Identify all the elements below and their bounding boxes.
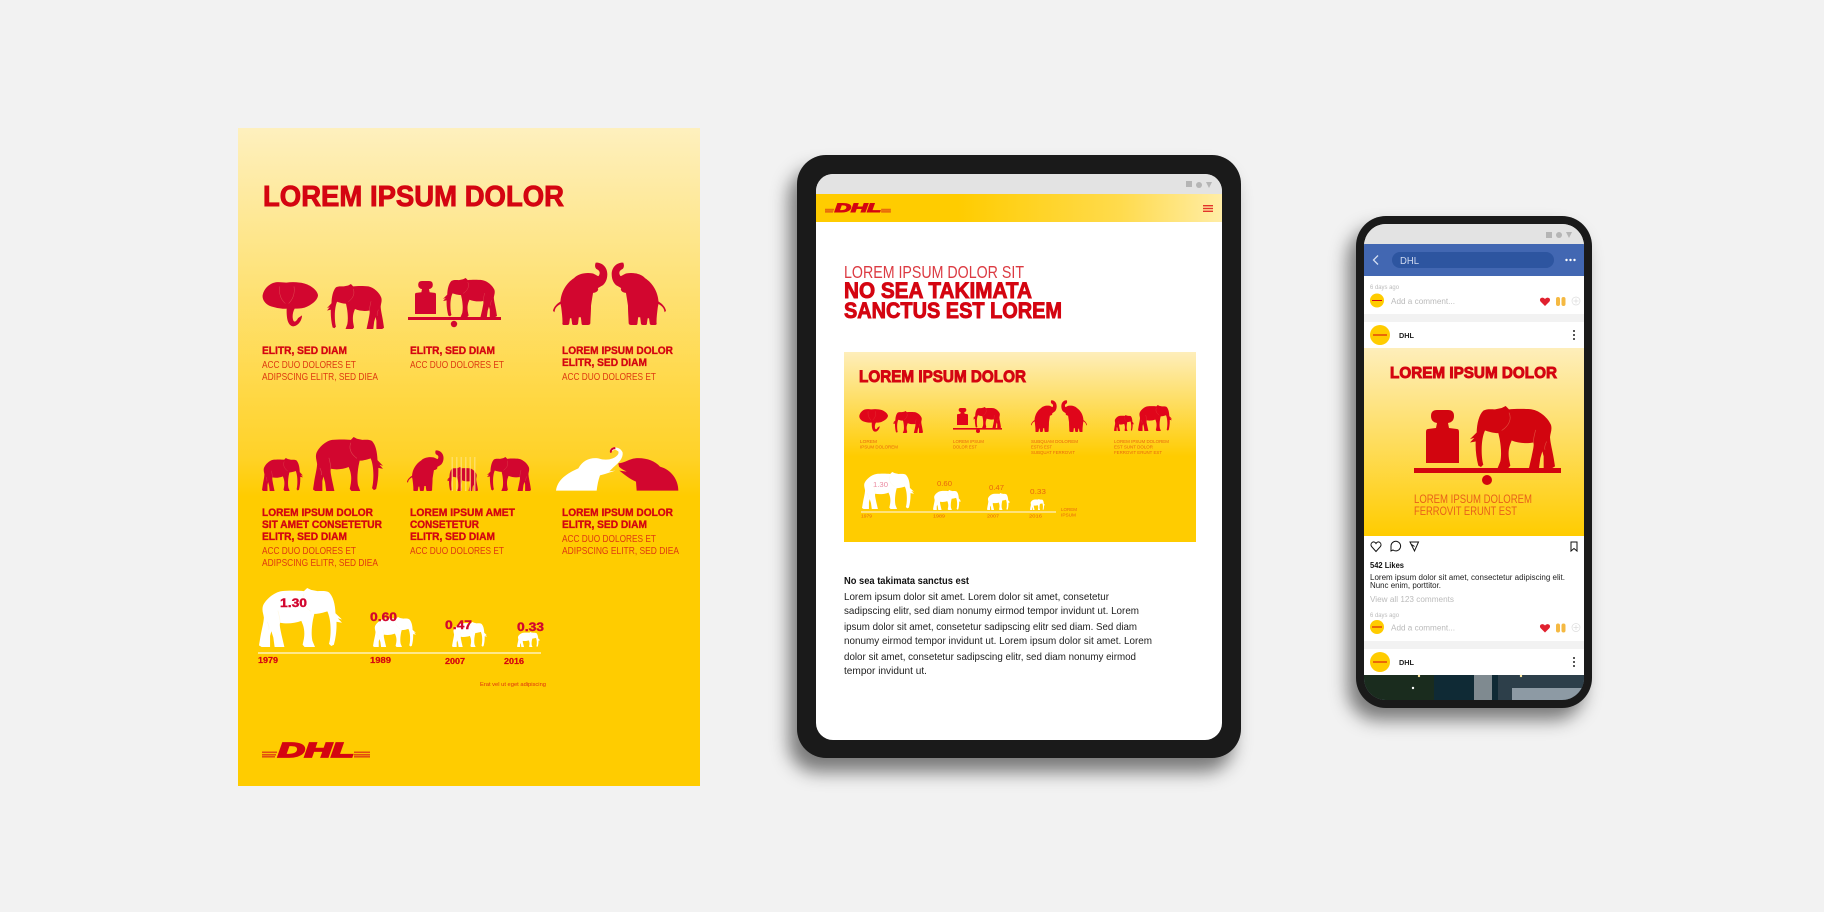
text block: column 3 row 2 — [562, 507, 679, 557]
phone status bar — [1364, 224, 1584, 244]
text block: column 2 row 1: ELITR, SED DIAM — [410, 345, 495, 357]
tablet body text: tempor invidunt ut. — [844, 665, 927, 677]
shadow: tablet — [789, 169, 1233, 772]
text block: column 2 row 2 — [410, 507, 515, 557]
tablet body text — [844, 575, 1152, 677]
text block: column 3 row 2: LOREM IPSUM DOLOR — [562, 507, 673, 519]
mini chart: IPSUM — [1061, 512, 1076, 518]
mini chart: 2016 — [1029, 514, 1043, 518]
tablet embedded infographic: LOREM IPSUM DOLOR — [859, 368, 1026, 386]
text block: column 2 row 1 — [410, 345, 504, 371]
text block: column 3 row 1: LOREM IPSUM DOLOR — [562, 345, 673, 357]
icon: free and caged elephants — [407, 450, 531, 491]
text block: column 1 row 2: ACC DUO DOLORES ET — [262, 545, 356, 557]
post image — [1364, 348, 1584, 536]
comment row top — [1370, 285, 1580, 308]
icon: small and large elephant — [262, 437, 383, 491]
text block: column 3 row 2: ELITR, SED DIAM — [562, 519, 647, 531]
tablet body text: sadipscing elitr, sed diam nonumy eirmod tempor invidunt ut. Lorem — [844, 605, 1139, 617]
mini chart: 0.60 — [937, 479, 952, 488]
icon: weight and elephant — [1414, 406, 1561, 485]
comment row bottom — [1370, 613, 1580, 634]
post header — [1370, 325, 1575, 345]
tablet status bar — [816, 174, 1222, 194]
text block: column 2 row 2: CONSETETUR — [410, 519, 479, 531]
page canvas — [238, 128, 1597, 786]
second post header — [1370, 652, 1575, 672]
mini chart: LOREM — [1061, 507, 1077, 512]
panel: phone — [1356, 216, 1592, 708]
icon: white and red elephants touching trunks — [556, 447, 678, 491]
post caption text — [1414, 494, 1532, 515]
tablet heading: NO SEA TAKIMATA — [844, 278, 1032, 303]
second post photo — [1364, 675, 1584, 700]
tablet body text: No sea takimata sanctus est — [844, 575, 969, 587]
separator band — [1364, 314, 1584, 322]
mini captions: FERROVIT ERUNT EST — [1114, 450, 1162, 455]
icon: two trumpeting elephants — [553, 263, 666, 325]
mini chart: 1979 — [861, 514, 873, 518]
text block: column 1 row 2: ADIPSCING ELITR, SED DIEA — [262, 557, 378, 569]
mini captions: DOLOR EST — [953, 444, 977, 450]
mini captions: IPSUM DOLOREM — [860, 444, 898, 450]
tablet heading: SANCTUS EST LOREM — [844, 298, 1062, 323]
mini icon row — [859, 400, 1172, 433]
icon: add reaction — [1572, 624, 1580, 632]
icon: add reaction — [1572, 297, 1580, 305]
mini captions: SUBQUAT FERROVIT — [1031, 450, 1075, 455]
likes and caption — [1370, 561, 1565, 604]
phone app bar — [1364, 244, 1584, 276]
chart: shrinking elephants: 0.33 — [517, 620, 544, 634]
post action icons — [1371, 541, 1577, 552]
text block: column 1 row 2: LOREM IPSUM DOLOR — [262, 507, 373, 519]
comment row top: 6 days ago — [1370, 285, 1400, 291]
likes and caption: 542 Likes — [1370, 561, 1405, 570]
post header: DHL — [1399, 331, 1414, 340]
text block: column 1 row 2: ELITR, SED DIAM — [262, 531, 347, 543]
text block: column 3 row 1: ELITR, SED DIAM — [562, 357, 647, 369]
chart: shrinking elephants: 1989 — [370, 656, 392, 665]
tablet heading: LOREM IPSUM DOLOR SIT — [844, 262, 1024, 282]
mini captions: LOREM — [860, 439, 877, 444]
comment row bottom: 6 days ago — [1370, 613, 1400, 619]
icon: menu — [1203, 205, 1213, 212]
footnote: Erat vel ut eget adipiscing — [480, 682, 546, 688]
comment row top: Add a comment... — [1391, 297, 1455, 306]
tablet body text: Lorem ipsum dolor sit amet. Lorem dolor sit amet, consetetur — [844, 591, 1109, 603]
phone app bar: DHL — [1400, 256, 1419, 267]
text block: column 2 row 2: LOREM IPSUM AMET — [410, 507, 515, 519]
mini chart: 0.33 — [1030, 487, 1046, 496]
text block: column 1 row 1: ACC DUO DOLORES ET — [262, 359, 356, 371]
mini captions: ESTIS EST — [1031, 444, 1052, 450]
icon: raised hands — [1556, 624, 1566, 632]
tablet header bar — [816, 194, 1222, 222]
post caption text: FERROVIT ERUNT EST — [1414, 504, 1518, 518]
text block: column 1 row 1: ADIPSCING ELITR, SED DIEA — [262, 371, 378, 383]
post caption text: LOREM IPSUM DOLOREM — [1414, 492, 1532, 506]
comment row bottom: Add a comment... — [1391, 624, 1455, 632]
mini captions — [860, 439, 1169, 455]
mini chart: 1989 — [933, 514, 946, 518]
icon: heart — [1540, 298, 1550, 306]
tablet body text: nonumy eirmod tempor invidunt ut. Lorem ipsum dolor sit amet. Lorem — [844, 635, 1152, 647]
panel: poster — [238, 128, 700, 786]
mini captions: LOREM IPSUM DOLOREM — [1114, 439, 1169, 444]
mini chart: 1.30 — [873, 480, 888, 489]
text block: column 3 row 2: ADIPSCING ELITR, SED DIEA — [562, 545, 679, 557]
chart: shrinking elephants — [258, 588, 544, 666]
likes and caption: Nunc enim, porttitor. — [1370, 581, 1441, 590]
chart: shrinking elephants: 2016 — [504, 657, 525, 666]
tablet embedded infographic — [844, 352, 1196, 542]
icon: elephant head and elephant — [263, 282, 384, 329]
mini chart — [861, 472, 1077, 518]
panel: tablet — [797, 155, 1241, 758]
text block: column 1 row 1 — [262, 345, 378, 383]
mini captions: SUBQUAM DOLOREM — [1031, 439, 1078, 444]
likes and caption: Lorem ipsum dolor sit amet, consectetur adipiscing elit. — [1370, 573, 1565, 582]
tablet body text: dolor sit amet, consetetur sadipscing elitr, sed diam nonumy eirmod — [844, 651, 1136, 663]
poster title: LOREM IPSUM DOLOR — [263, 181, 564, 213]
chart: shrinking elephants: 1.30 — [280, 596, 307, 610]
text block: column 1 row 2: SIT AMET CONSETETUR — [262, 519, 382, 531]
shadow: phone — [1348, 228, 1584, 720]
chart: shrinking elephants: 1979 — [258, 656, 279, 665]
tablet heading — [844, 266, 1062, 318]
icon: weight and elephant on scale — [408, 278, 501, 327]
second post header: DHL — [1399, 658, 1414, 667]
text block: column 2 row 2: ACC DUO DOLORES ET — [410, 545, 504, 557]
mini captions: LOREM IPSUM — [953, 439, 984, 444]
tablet logo: DHL — [825, 203, 891, 212]
chart: shrinking elephants: 0.47 — [445, 618, 472, 632]
post image: LOREM IPSUM DOLOR — [1390, 365, 1557, 382]
likes and caption: View all 123 comments — [1370, 595, 1454, 604]
separator band — [1364, 641, 1584, 649]
mini chart: 0.47 — [989, 483, 1004, 492]
text block: column 1 row 2 — [262, 507, 382, 569]
logo: DHL: DHL — [278, 740, 354, 762]
text block: column 2 row 1: ACC DUO DOLORES ET — [410, 359, 504, 371]
text block: column 1 row 1: ELITR, SED DIAM — [262, 345, 347, 357]
text block: column 3 row 2: ACC DUO DOLORES ET — [562, 533, 656, 545]
chart: shrinking elephants: 0.60 — [370, 610, 397, 624]
chart: shrinking elephants: 2007 — [445, 657, 466, 666]
text block: column 3 row 1 — [562, 345, 673, 383]
tablet body text: ipsum dolor sit amet, consetetur sadipscing elitr sed diam. Sed diam — [844, 621, 1137, 633]
logo: DHL — [262, 740, 370, 762]
icon: raised hands — [1556, 297, 1566, 306]
mini captions: EST SUNT DOLOR — [1114, 444, 1154, 450]
icon: heart — [1540, 624, 1550, 632]
mini chart: 2007 — [987, 514, 1000, 518]
text block: column 2 row 2: ELITR, SED DIAM — [410, 531, 495, 543]
text block: column 3 row 1: ACC DUO DOLORES ET — [562, 371, 656, 383]
tablet logo: DHL: DHL — [835, 201, 881, 215]
